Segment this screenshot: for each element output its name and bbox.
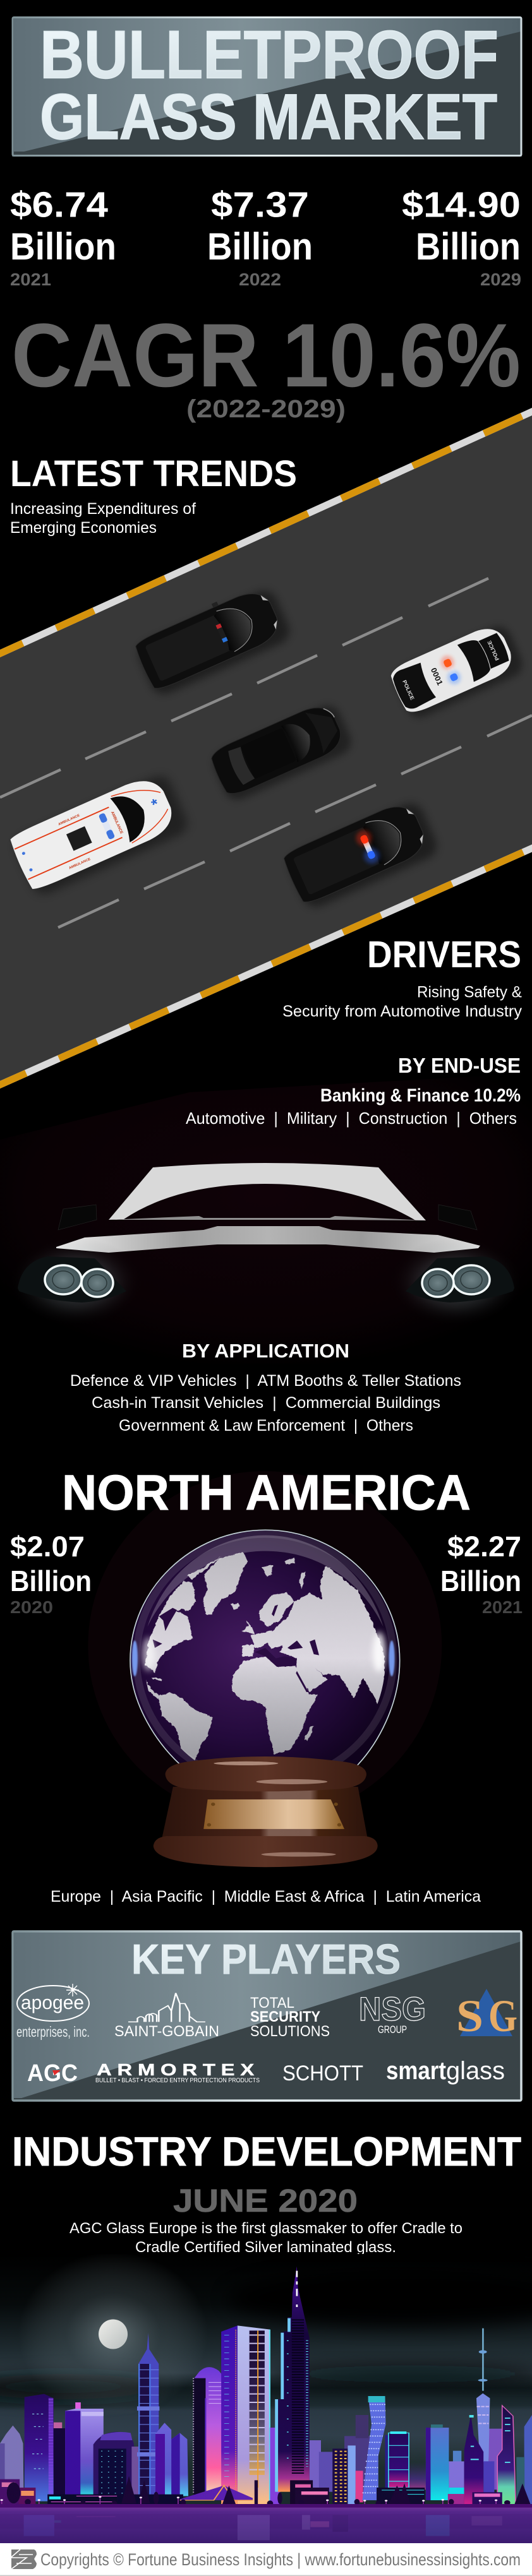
heading: north america: NORTH AMERICA (62, 1464, 471, 1520)
lane markings (0, 578, 532, 927)
stat: North America 2021: $2.27 (447, 1530, 521, 1563)
right towers (426, 2428, 449, 2500)
logo: apogee (16, 1984, 90, 2040)
logo: smartglass (386, 2057, 505, 2085)
stat: 2022 market value: Billion (207, 225, 313, 268)
yellow window tower (332, 2448, 348, 2504)
logo: saint-gobain (114, 1993, 219, 2040)
car: police: POLICE (486, 640, 500, 662)
stat: North America 2020: 2020 (10, 1597, 53, 1617)
logo: total security solutions: TOTAL (250, 1995, 294, 2012)
stat: North America 2020: Billion (10, 1565, 92, 1597)
globe highlights (147, 1535, 384, 1627)
stat: 2029 market value: $14.90 (402, 184, 521, 225)
side mirror left (58, 1205, 97, 1230)
text: driver description: Security from Automotive Industry (282, 1003, 522, 1020)
logo: smartglass: glass (446, 2057, 505, 2085)
logo: NSG group: NSG (359, 1991, 426, 2028)
car: police: 0001 (429, 667, 444, 687)
logo: AGC: AGC (27, 2060, 78, 2087)
street lamps (0, 2496, 498, 2504)
text: development description: Cradle Certified Silver laminated glass. (135, 2239, 396, 2256)
headlight right (390, 1237, 523, 1326)
bottom road barrier (0, 843, 532, 1090)
car: ambulance: * (149, 796, 162, 813)
footer (0, 2543, 532, 2576)
car front silhouette (0, 1073, 532, 1364)
logo: SG: S (456, 1991, 483, 2041)
top road barrier (0, 405, 532, 660)
heading: june 2020: JUNE 2020 (173, 2183, 358, 2219)
stat: 2029 market value: Billion (416, 225, 521, 268)
stat: 2022 market value (207, 184, 313, 289)
panel: title glass (12, 16, 522, 172)
CAGR period: (2022-2029) (186, 395, 346, 423)
logo: armortex: ARMORTEX (97, 2060, 260, 2079)
car: ambulance (8, 768, 191, 899)
text: application segments: Defence & VIP Vehicles | ATM Booths & Teller Stations (70, 1372, 461, 1390)
logo: total security solutions (250, 1995, 330, 2040)
stat: North America 2021: 2021 (482, 1597, 523, 1617)
text: end-use segments: Automotive | Military | Construction | Others (186, 1109, 517, 1128)
stat: North America 2021 (440, 1530, 523, 1617)
car: ambulance: AMBULANCE (57, 814, 81, 826)
logo: schott: SCHOTT (282, 2061, 363, 2085)
stat: 2021 market value: $6.74 (10, 184, 108, 225)
logo: apogee: apogee (21, 1991, 84, 2013)
road (0, 405, 532, 1090)
stat: 2021 market value: 2021 (10, 270, 51, 289)
windshield wiper band (109, 1216, 426, 1220)
stat: North America 2020 (10, 1530, 92, 1617)
car: police: POLICE (401, 679, 416, 701)
illustration: glass globe on wooden stand (88, 1471, 442, 1820)
car: ambulance: AMBULANCE (68, 857, 92, 870)
stat: 2022 market value: $7.37 (211, 184, 309, 225)
low buildings (0, 2479, 20, 2505)
logo: armortex (95, 2060, 260, 2084)
title (40, 16, 499, 153)
text: latest trend description: Increasing Expenditures of (10, 500, 196, 518)
windshield (109, 1163, 426, 1220)
text: driver description (282, 984, 522, 1020)
icon: fortune business insights logo (11, 2549, 37, 2569)
headlight left (9, 1237, 142, 1326)
logo: smartglass: smart (386, 2057, 446, 2085)
text: driver description: Rising Safety & (417, 984, 522, 1001)
text: development description: AGC Glass Europe is the first glassmaker to offer Cradle to (70, 2220, 462, 2237)
stat: 2029 market value: 2029 (480, 270, 521, 289)
logo: apogee: enterprises, inc. (16, 2024, 90, 2040)
globe glass (130, 1530, 400, 1771)
panel: key players (12, 1931, 522, 2119)
car: black SUV (131, 579, 294, 698)
heading: by application: BY APPLICATION (182, 1340, 349, 1362)
water reflections (24, 2515, 502, 2541)
logo: armortex: BULLET • BLAST • FORCED ENTRY PROTECTION PRODUCTS (95, 2077, 260, 2084)
heading: industry development: INDUSTRY DEVELOPMENT (12, 2128, 521, 2174)
heading: key players: KEY PLAYERS (131, 1936, 401, 1983)
car: black SUV with lights (281, 796, 441, 912)
side mirror right (438, 1205, 477, 1230)
text: application segments: Government & Law Enforcement | Others (119, 1417, 413, 1434)
stat: North America 2020: $2.07 (10, 1530, 85, 1563)
tall glass tower (221, 2325, 238, 2505)
logo: total security solutions: SECURITY (250, 2008, 320, 2025)
lattice tower (138, 2333, 159, 2496)
logo: SG: G (488, 1991, 517, 2041)
brass plaque (203, 1799, 344, 1829)
buildings (0, 2267, 532, 2544)
text: development description (70, 2220, 462, 2256)
heading: latest trends: LATEST TRENDS (10, 453, 297, 494)
trees (7, 2476, 531, 2507)
world map (145, 1552, 384, 1763)
stat: 2022 market value: 2022 (239, 270, 281, 289)
waterfront (0, 2504, 532, 2508)
logo: SG (456, 1989, 517, 2041)
stat: 2029 market value (402, 184, 521, 289)
wooden stand (154, 1756, 378, 1867)
text: other regions: Europe | Asia Pacific | Middle East & Africa | Latin America (51, 1888, 481, 1905)
text: latest trend description (10, 500, 196, 537)
stat: 2021 market value: Billion (10, 225, 116, 268)
logo: saint-gobain: SAINT-GOBAIN (114, 2023, 219, 2040)
spire tower (270, 2428, 281, 2505)
cyan outline tower (385, 2435, 388, 2488)
round tower (193, 2367, 221, 2495)
car: police (387, 619, 527, 722)
text: latest trend description: Emerging Economies (10, 519, 157, 537)
car: black sedan (208, 698, 355, 804)
text: application segments: Cash-in Transit Vehicles | Commercial Buildings (92, 1394, 440, 1412)
bonnet highlight (56, 1226, 480, 1253)
stat: North America 2021: Billion (440, 1565, 521, 1597)
car: ambulance: AMBULANCE (110, 811, 124, 835)
heading: drivers: DRIVERS (367, 934, 521, 975)
heading: by end-use: BY END-USE (398, 1054, 521, 1077)
moon (99, 2320, 128, 2349)
twisted tower (363, 2396, 386, 2500)
left towers (25, 2394, 54, 2501)
logo: total security solutions: SOLUTIONS (250, 2023, 330, 2040)
illustration: night city skyline (0, 2252, 532, 2544)
logo: NSG group: GROUP (378, 2024, 407, 2036)
stat: 2021 market value (10, 184, 116, 289)
text: application segments (70, 1372, 461, 1434)
far skyline haze (409, 2462, 426, 2490)
